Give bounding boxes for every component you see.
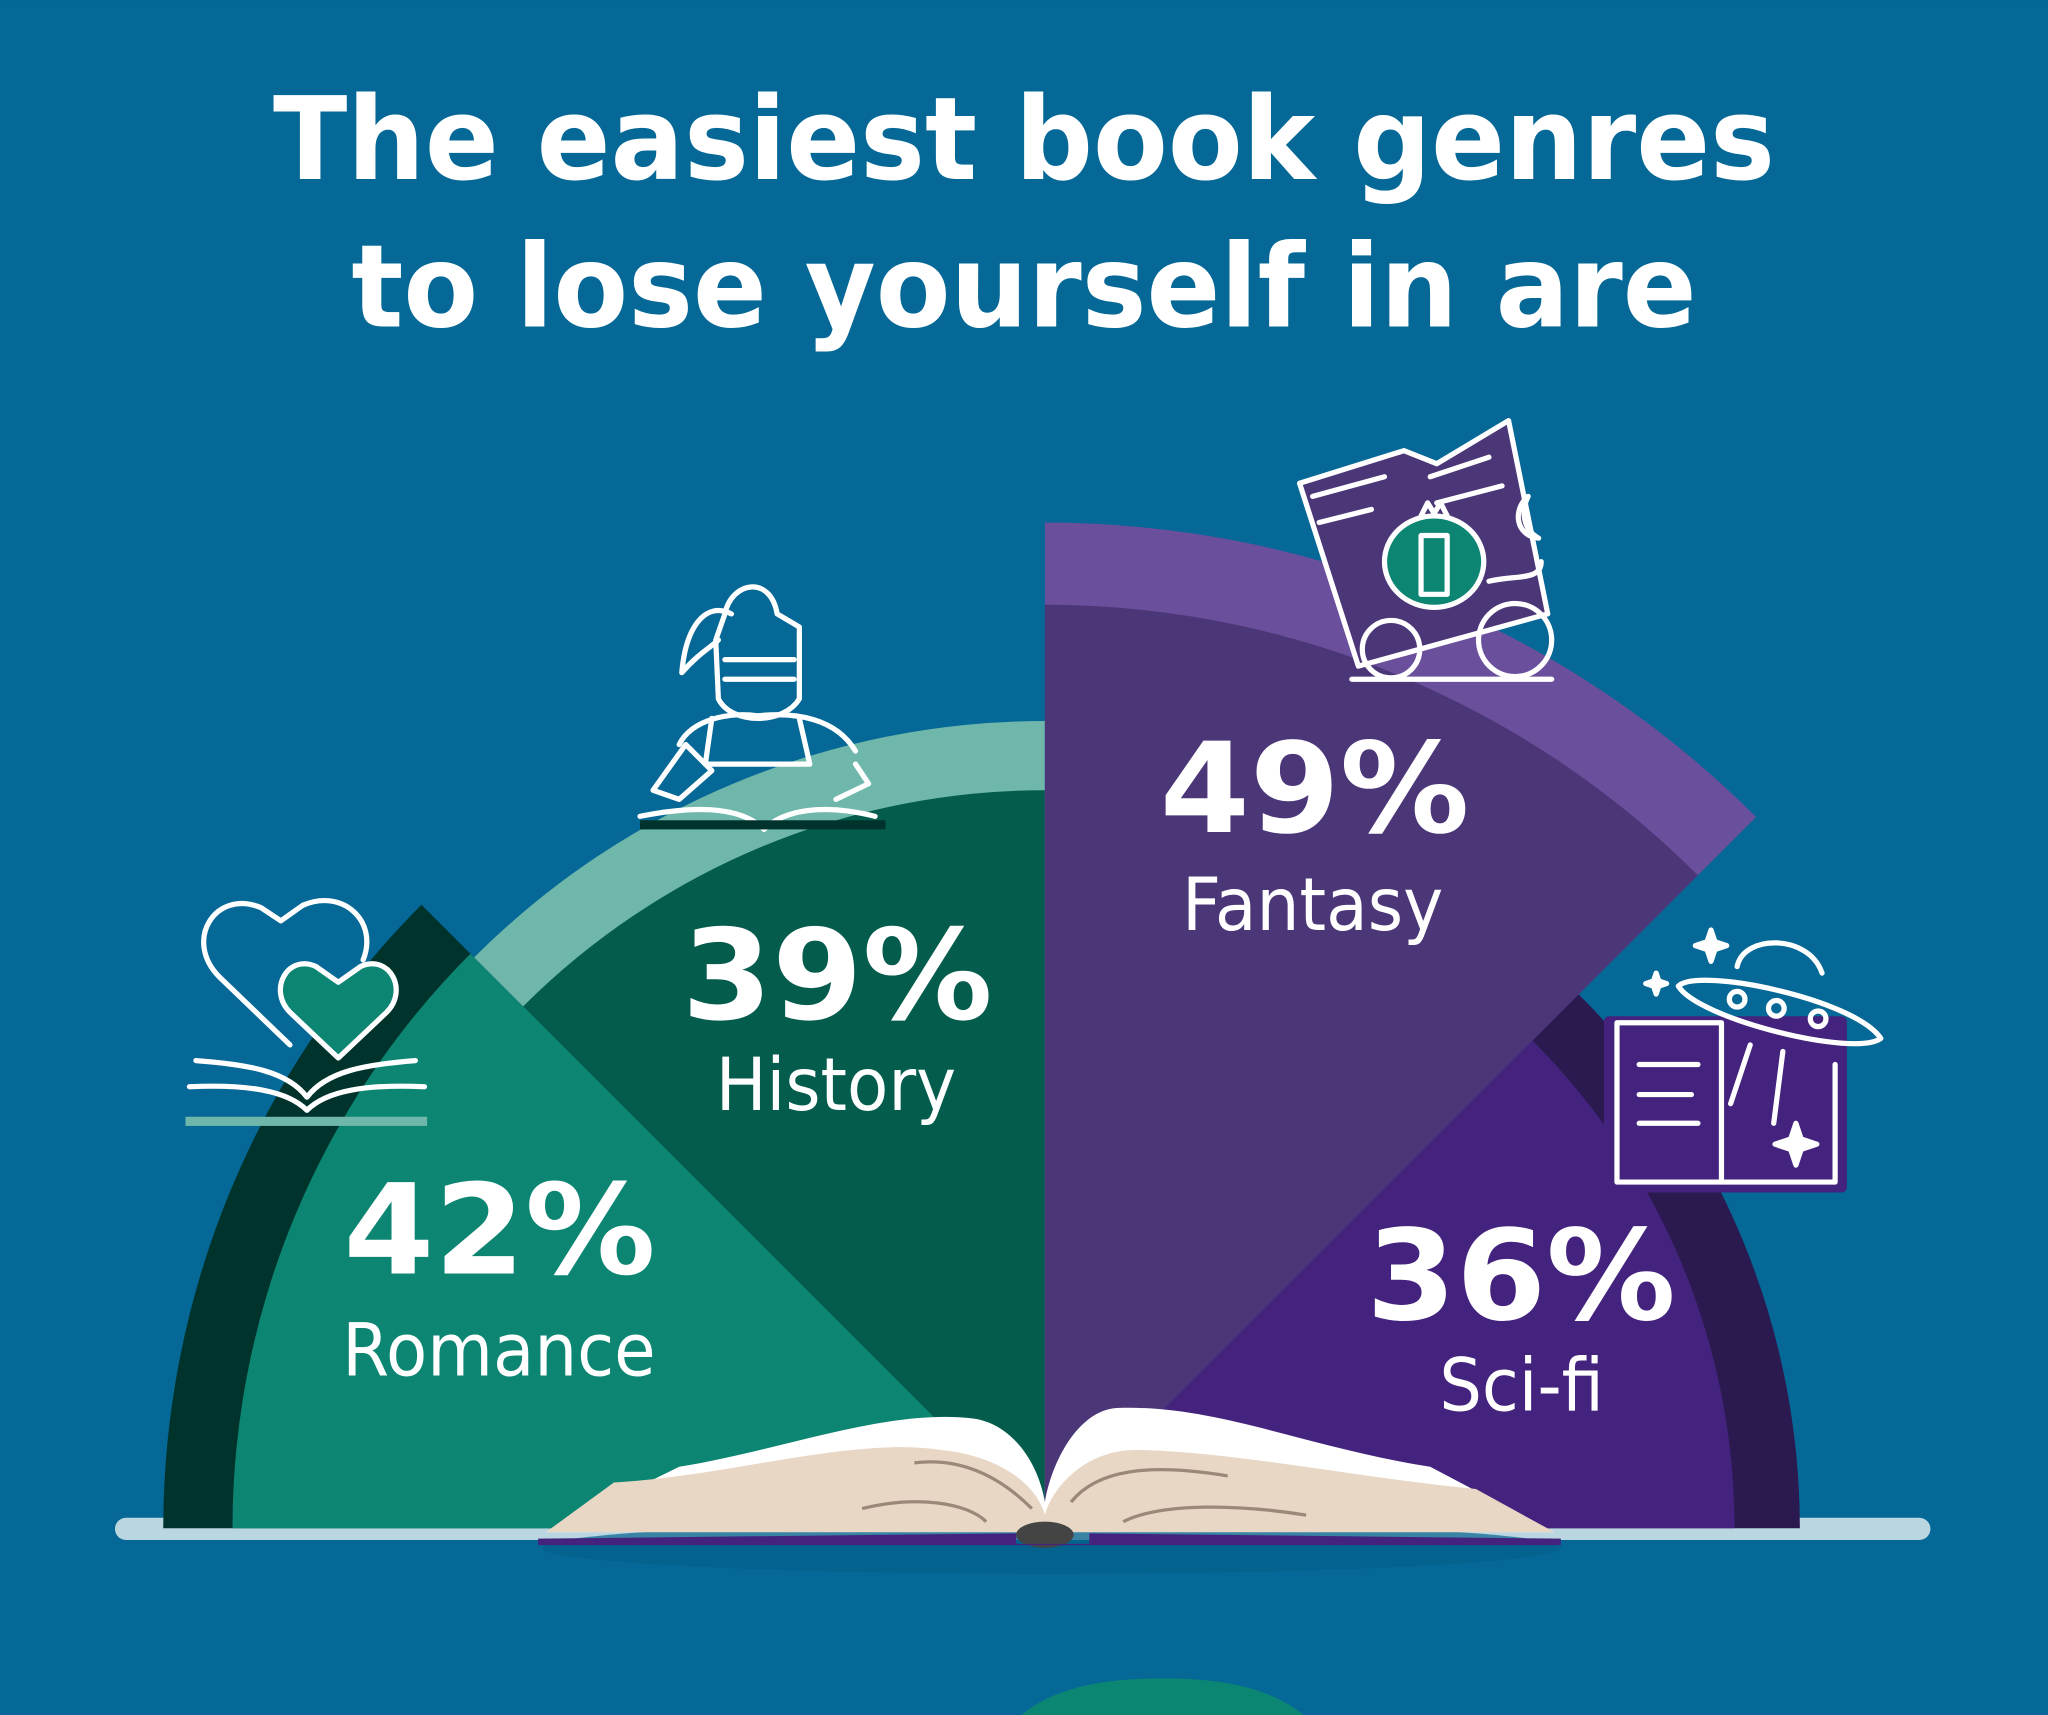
label: history: 39% — [682, 903, 993, 1049]
icon: ufo book (sci-fi) — [1604, 930, 1881, 1193]
label: fantasy: 49% — [1160, 716, 1469, 862]
label: fantasy: Fantasy — [1182, 863, 1443, 948]
wedge: sci-fi — [1045, 994, 1800, 1528]
label: sci-fi — [1366, 1203, 1676, 1429]
label: romance: Romance — [342, 1308, 656, 1393]
title — [273, 73, 1775, 355]
icon: heart book (romance) — [185, 901, 427, 1126]
label: romance: 42% — [344, 1158, 656, 1304]
icon: carriage book (fantasy) — [1300, 421, 1552, 679]
title: The easiest book genres — [273, 73, 1775, 207]
bottom hill — [1021, 1678, 1304, 1715]
open book — [538, 1408, 1561, 1574]
label: romance — [342, 1158, 656, 1393]
title: to lose yourself in are — [351, 221, 1697, 355]
label: history — [682, 903, 993, 1128]
baseline bar — [115, 1518, 1930, 1540]
label: fantasy — [1160, 716, 1469, 948]
wedge: fantasy — [1045, 522, 1756, 1528]
wedge: history — [474, 721, 1045, 1528]
label: sci-fi: Sci-fi — [1439, 1344, 1604, 1429]
icon: knight (history) — [640, 587, 886, 829]
label: history: History — [716, 1043, 956, 1128]
wedge: romance — [163, 905, 1045, 1528]
label: sci-fi: 36% — [1366, 1203, 1676, 1349]
